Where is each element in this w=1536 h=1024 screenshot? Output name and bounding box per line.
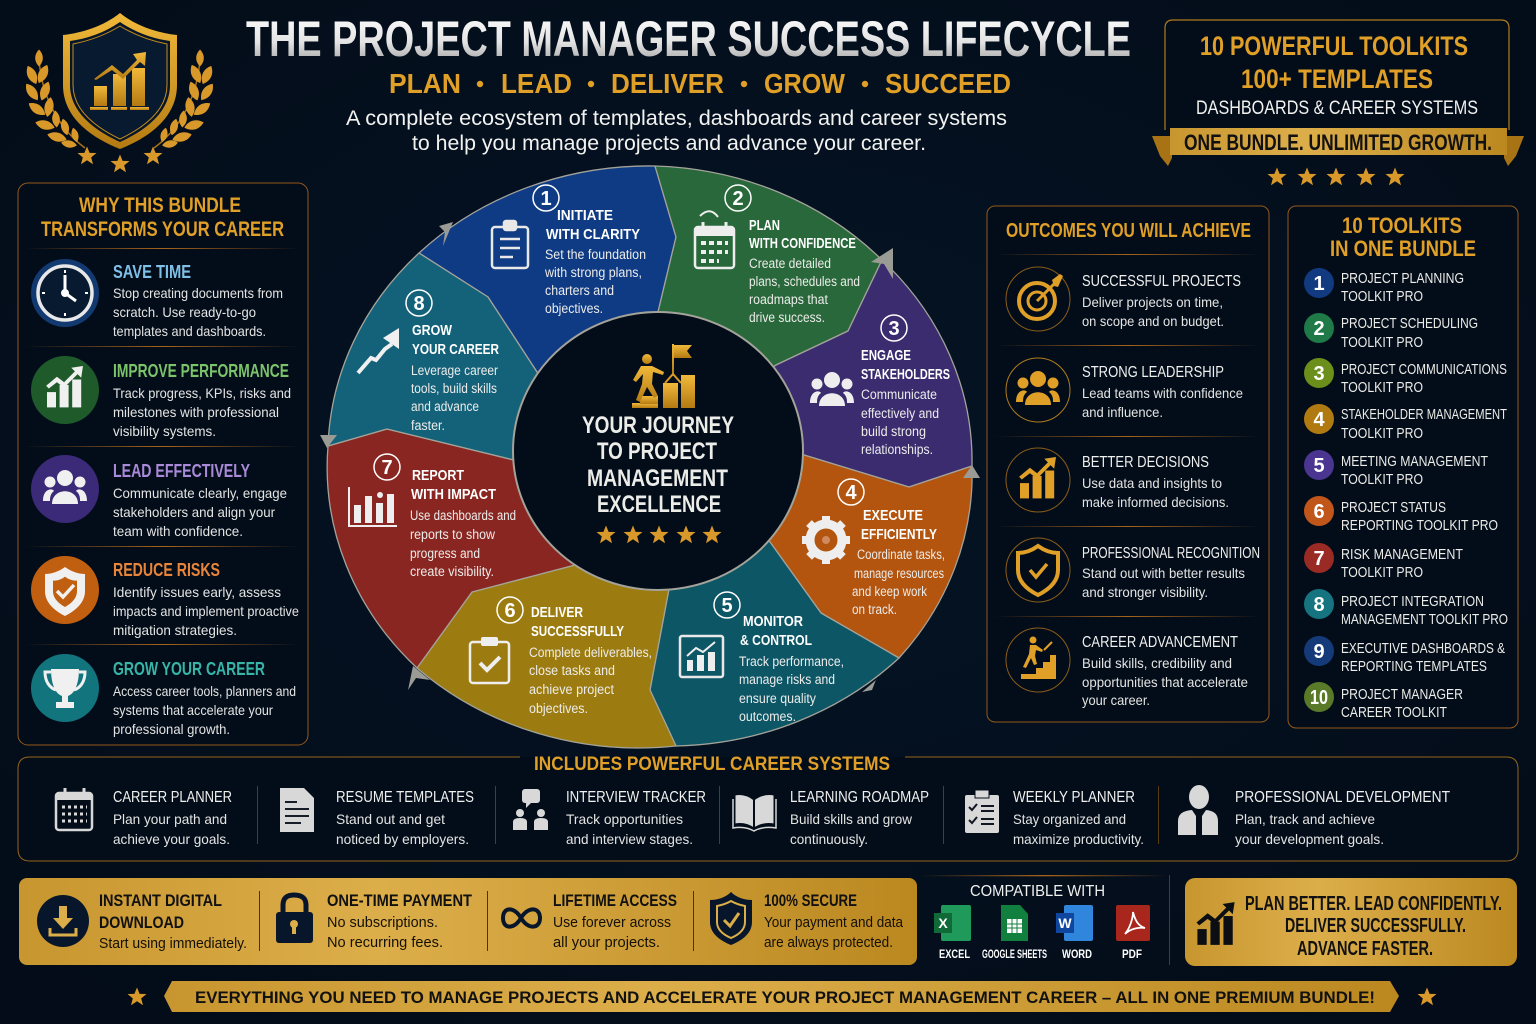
item: reduce risks: REDUCE RISKS (113, 560, 220, 580)
ribbon (1152, 128, 1524, 166)
step 2: Create detailed (749, 256, 831, 271)
step 4: Coordinate tasks, (857, 547, 945, 562)
panel: 10 toolkits (1288, 206, 1518, 728)
panel: bundle badge: 10 POWERFUL TOOLKITS (1200, 31, 1468, 61)
outcome: career advancement: your career. (1082, 692, 1150, 708)
toolkit 9: REPORTING TEMPLATES (1341, 659, 1487, 675)
step 3: effectively and (861, 406, 939, 421)
outcome: strong leadership: Lead teams with confidence (1082, 385, 1243, 401)
outcome: professional recognition: Stand out with better results (1082, 565, 1245, 581)
icon: shield (31, 556, 99, 624)
toolkit 7 (1304, 543, 1463, 581)
icon: gear (802, 516, 850, 564)
icon: checked clipboard (470, 637, 509, 683)
item: save time: SAVE TIME (113, 262, 191, 282)
step 3: Communicate (861, 387, 937, 402)
outcome: successful projects: SUCCESSFUL PROJECTS (1082, 273, 1241, 290)
item: reduce risks: Identify issues early, assess (113, 584, 281, 600)
step 6: Complete deliverables, (529, 645, 652, 660)
icon: pdf (1116, 905, 1150, 961)
icon: pdf: PDF (1122, 947, 1142, 961)
toolkits heading: 10 TOOLKITS (1342, 213, 1462, 238)
hub heading: MANAGEMENT (587, 465, 728, 492)
icon: document (280, 788, 314, 832)
system: career planner: achieve your goals. (113, 831, 230, 847)
outcome: better decisions (1082, 454, 1229, 510)
heading (41, 194, 284, 241)
toolkit 7: TOOLKIT PRO (1341, 565, 1423, 581)
step 4: on track. (852, 602, 897, 617)
step 3: STAKEHOLDERS (861, 366, 950, 383)
icon: climbing to flag (632, 344, 695, 408)
step 2: 2 (732, 188, 744, 210)
step 2: WITH CONFIDENCE (749, 235, 856, 252)
subtitle: LEAD (501, 68, 572, 99)
outcome: successful projects (1082, 273, 1241, 329)
title: THE PROJECT MANAGER SUCCESS LIFECYCLE (246, 11, 1131, 67)
step 5: & CONTROL (740, 632, 812, 649)
system: weekly planner (1013, 789, 1144, 847)
icon: padlock (276, 895, 313, 943)
icon: word (1056, 905, 1093, 961)
toolkit 1 (1304, 268, 1464, 305)
icon: interview (513, 789, 548, 830)
benefit: lifetime access: all your projects. (553, 934, 660, 951)
item: improve performance: IMPROVE PERFORMANCE (113, 361, 289, 381)
segment 2: plan (655, 166, 882, 451)
step 2: plans, schedules and (749, 274, 860, 289)
tagline: A complete ecosystem of templates, dashboards and career systems (346, 107, 1007, 130)
icon: shield check (1006, 538, 1070, 602)
outcome: career advancement: CAREER ADVANCEMENT (1082, 634, 1238, 651)
step 1: Set the foundation (545, 247, 646, 262)
step 4 (802, 479, 945, 617)
panel: compatible with (920, 875, 1170, 965)
icon: rising arrow (358, 328, 399, 373)
toolkit 10: CAREER TOOLKIT (1341, 705, 1447, 721)
step 3: relationships. (861, 442, 933, 457)
toolkit 3: TOOLKIT PRO (1341, 380, 1423, 396)
item: improve performance: milestones with professional (113, 404, 279, 420)
icon: excel: EXCEL (939, 947, 970, 961)
icon: trophy (31, 654, 99, 722)
item: grow your career: GROW YOUR CAREER (113, 659, 265, 679)
item: improve performance: visibility systems. (113, 423, 216, 439)
panel: career systems (18, 754, 1518, 861)
step 7: WITH IMPACT (411, 486, 496, 503)
subtitle: GROW (764, 68, 846, 99)
system: resume templates (336, 789, 474, 847)
item: improve performance: Track progress, KPIs, risks and (113, 385, 291, 401)
toolkit 6: 6 (1313, 501, 1325, 523)
step 8: 8 (413, 293, 425, 315)
hub stars (596, 526, 722, 543)
heading: WHY THIS BUNDLE (79, 194, 241, 217)
icon: open book (733, 795, 776, 831)
icon: clipboard (492, 221, 528, 268)
center hub (513, 312, 803, 590)
segment 3: engage (658, 260, 972, 487)
item: grow your career: professional growth. (113, 721, 230, 737)
step 5: ensure quality (739, 691, 816, 706)
emblem: gold shield with laurels (23, 13, 216, 172)
benefit: one-time payment: No recurring fees. (327, 934, 443, 951)
item: save time: Stop creating documents from (113, 285, 283, 301)
step 5: manage risks and (739, 672, 835, 687)
callout text (1245, 893, 1502, 960)
toolkit 6 (1304, 496, 1498, 534)
icon: infinity (503, 909, 540, 927)
toolkit 9: 9 (1313, 641, 1325, 663)
item: save time: scratch. Use ready-to-go (113, 304, 256, 320)
item: reduce risks (113, 560, 299, 638)
benefit: lifetime access: LIFETIME ACCESS (553, 891, 677, 910)
item: reduce risks: mitigation strategies. (113, 622, 237, 638)
segment 1: initiate (419, 166, 676, 451)
benefit: secure: 100% SECURE (764, 891, 857, 910)
step 6 (470, 597, 652, 716)
step 8: tools, build skills (411, 381, 497, 396)
step 3: 3 (888, 318, 900, 340)
benefit: secure (764, 891, 904, 951)
item: save time: templates and dashboards. (113, 323, 266, 339)
bottom banner (128, 981, 1436, 1012)
icon: clock (31, 259, 99, 327)
step 5: outcomes. (739, 709, 796, 724)
toolkit 10: 10 (1310, 687, 1328, 709)
segment 4: execute (658, 451, 972, 658)
lifecycle wheel (320, 166, 980, 748)
system: career planner: Plan your path and (113, 811, 227, 827)
toolkit 9 (1304, 636, 1505, 675)
benefit: secure: are always protected. (764, 934, 893, 951)
icon: excel (934, 905, 971, 961)
system: weekly planner: WEEKLY PLANNER (1013, 789, 1135, 806)
icon: target (1006, 267, 1070, 331)
system: interview tracker: and interview stages. (566, 831, 693, 847)
icon: secure shield (710, 892, 752, 945)
icon: checklist (965, 790, 999, 833)
benefit: instant download (99, 891, 247, 952)
toolkit 3 (1304, 358, 1507, 396)
system: learning roadmap (790, 789, 929, 847)
outcome: strong leadership: STRONG LEADERSHIP (1082, 364, 1224, 381)
toolkit 3: 3 (1313, 363, 1325, 385)
panel: why this bundle (18, 183, 308, 745)
subtitle: SUCCEED (885, 68, 1011, 99)
toolkit 10 (1304, 682, 1463, 721)
item: grow your career (113, 659, 296, 737)
step 6: achieve project (529, 682, 614, 697)
toolkit 5: MEETING MANAGEMENT (1341, 454, 1488, 470)
step 4: EXECUTE (863, 507, 923, 524)
segment 7: report (327, 429, 658, 668)
step 4: 4 (845, 482, 857, 504)
step 5: 5 (721, 595, 733, 617)
panel: bundle badge (1152, 20, 1524, 185)
panel: bundle badge: 100+ TEMPLATES (1241, 64, 1433, 94)
system: professional development (1235, 789, 1450, 847)
benefit: one-time payment: No subscriptions. (327, 914, 438, 931)
outcome: career advancement: Build skills, credibility and (1082, 655, 1232, 671)
icon: person (1178, 785, 1218, 835)
icon: people (810, 372, 854, 406)
step 1: with strong plans, (544, 265, 642, 280)
system: weekly planner: Stay organized and (1013, 811, 1126, 827)
step 8: faster. (411, 418, 445, 433)
system: resume templates: RESUME TEMPLATES (336, 789, 474, 806)
toolkits heading: IN ONE BUNDLE (1330, 236, 1476, 261)
icon: download (37, 895, 89, 947)
outcome: career advancement: opportunities that accelerate (1082, 674, 1248, 690)
benefit: lifetime access (553, 891, 677, 951)
rating stars (1268, 168, 1404, 185)
toolkits heading (1330, 213, 1476, 261)
segment 6: deliver (417, 451, 676, 748)
career systems heading: INCLUDES POWERFUL CAREER SYSTEMS (534, 754, 890, 775)
step 2 (695, 185, 860, 325)
outcome: professional recognition: PROFESSIONAL RECOGNITION (1082, 545, 1260, 562)
compatible heading: COMPATIBLE WITH (970, 883, 1105, 900)
hub heading: TO PROJECT (597, 438, 717, 465)
system: interview tracker (566, 789, 706, 847)
system: learning roadmap: continuously. (790, 831, 868, 847)
tagline (346, 107, 1007, 155)
outcome: better decisions: Use data and insights to (1082, 475, 1222, 491)
toolkit 5: TOOLKIT PRO (1341, 472, 1423, 488)
tagline: to help you manage projects and advance your career. (412, 132, 926, 155)
toolkit 2 (1304, 313, 1478, 351)
callout: plan better (1185, 878, 1517, 966)
icon: calendar (56, 788, 92, 830)
step 1: 1 (540, 188, 552, 210)
item: lead effectively (113, 461, 287, 539)
step 5 (680, 592, 844, 724)
toolkit 4: TOOLKIT PRO (1341, 426, 1423, 442)
benefit: instant download: INSTANT DIGITAL (99, 891, 222, 910)
system: interview tracker: INTERVIEW TRACKER (566, 789, 706, 806)
toolkit 7: RISK MANAGEMENT (1341, 547, 1463, 563)
outcome: successful projects: Deliver projects on time, (1082, 294, 1223, 310)
item: grow your career: Access career tools, planners and (113, 683, 296, 699)
icon: google sheets (982, 905, 1047, 961)
step 8: Leverage career (411, 363, 498, 378)
item: improve performance (113, 361, 291, 439)
step 4: manage resources (854, 566, 944, 581)
toolkit 6: REPORTING TOOLKIT PRO (1341, 518, 1498, 534)
step 1: objectives. (545, 301, 603, 316)
outcome: better decisions: BETTER DECISIONS (1082, 454, 1209, 471)
icon: word: W (1058, 915, 1072, 931)
step 4: EFFICIENTLY (861, 526, 937, 543)
step 7 (349, 454, 516, 579)
hub heading: EXCELLENCE (597, 491, 721, 518)
benefit: one-time payment (327, 891, 473, 951)
toolkit 2: PROJECT SCHEDULING (1341, 316, 1478, 332)
system: professional development: PROFESSIONAL DEVELOPMENT (1235, 789, 1450, 806)
system: interview tracker: Track opportunities (566, 811, 683, 827)
toolkit 2: TOOLKIT PRO (1341, 335, 1423, 351)
step 7: Use dashboards and (410, 508, 516, 523)
icon: excel: X (938, 915, 948, 931)
step 7: 7 (381, 457, 393, 479)
icon: monitor chart (680, 636, 723, 677)
step 8: YOUR CAREER (412, 341, 499, 358)
callout text: ADVANCE FASTER. (1297, 938, 1433, 960)
outcome: successful projects: on scope and on budget. (1082, 313, 1224, 329)
icon: team (1006, 358, 1070, 422)
panel: purchase benefits bar (19, 878, 917, 965)
bottom banner: EVERYTHING YOU NEED TO MANAGE PROJECTS AND ACCELERATE YOUR PROJECT MANAGEMENT CAREER – ALL IN ONE PREMIUM BUNDLE! (195, 988, 1375, 1007)
step 1: INITIATE (557, 207, 613, 224)
step 1: WITH CLARITY (546, 226, 640, 243)
step 1 (492, 185, 646, 316)
toolkit 1: 1 (1313, 273, 1325, 295)
item: lead effectively: team with confidence. (113, 523, 243, 539)
subtitle (389, 68, 1011, 99)
toolkit 2: 2 (1313, 318, 1325, 340)
step 7: create visibility. (410, 564, 494, 579)
system: weekly planner: maximize productivity. (1013, 831, 1144, 847)
outcome: better decisions: make informed decisions. (1082, 494, 1229, 510)
toolkit 5 (1304, 450, 1488, 488)
arrowheads (320, 222, 980, 692)
item: lead effectively: Communicate clearly, engage (113, 485, 287, 501)
heading: TRANSFORMS YOUR CAREER (41, 218, 284, 241)
benefit: one-time payment: ONE-TIME PAYMENT (327, 891, 473, 910)
subtitle: DELIVER (611, 68, 724, 99)
hub heading (582, 412, 734, 518)
step 2: roadmaps that (749, 292, 828, 307)
step 3: build strong (861, 424, 926, 439)
toolkit 1: TOOLKIT PRO (1341, 289, 1423, 305)
hub heading: YOUR JOURNEY (582, 412, 734, 439)
callout text: DELIVER SUCCESSFULLY. (1285, 915, 1466, 937)
step 3 (810, 315, 950, 457)
icon: climbing stairs (1006, 628, 1070, 692)
benefit: secure: Your payment and data (764, 914, 904, 931)
icon: growth chart dark (1196, 902, 1235, 945)
system: learning roadmap: LEARNING ROADMAP (790, 789, 929, 806)
system: learning roadmap: Build skills and grow (790, 811, 913, 827)
subtitle: PLAN (389, 68, 461, 99)
step 8 (358, 290, 499, 433)
step 8: and advance (411, 399, 479, 414)
system: resume templates: Stand out and get (336, 811, 445, 827)
item: reduce risks: impacts and implement proactive (113, 603, 299, 619)
benefit: instant download: DOWNLOAD (99, 913, 184, 932)
system: professional development: Plan, track and achieve (1235, 811, 1375, 827)
toolkit 7: 7 (1313, 548, 1325, 570)
outcome: strong leadership (1082, 364, 1243, 420)
icon: bar chart (349, 487, 397, 526)
segment 5: monitor (650, 451, 899, 746)
step 8: GROW (412, 322, 453, 339)
toolkit 5: 5 (1313, 455, 1325, 477)
item: grow your career: systems that accelerate your (113, 702, 273, 718)
toolkit 4: 4 (1313, 409, 1325, 431)
icon: growth chart (31, 356, 99, 424)
icon: calendar (695, 211, 734, 268)
step 7: REPORT (412, 467, 464, 484)
step 5: Track performance, (739, 654, 844, 669)
step 6: 6 (504, 600, 516, 622)
outcome: professional recognition: and stronger visibility. (1082, 584, 1208, 600)
toolkit 10: PROJECT MANAGER (1341, 687, 1463, 703)
toolkit 1: PROJECT PLANNING (1341, 271, 1464, 287)
outcomes heading: OUTCOMES YOU WILL ACHIEVE (1006, 220, 1251, 242)
system: career planner: CAREER PLANNER (113, 789, 232, 806)
step 6: DELIVER (531, 604, 583, 621)
step 7: progress and (410, 546, 480, 561)
outcome: career advancement (1082, 634, 1248, 708)
toolkit 4 (1304, 404, 1507, 442)
toolkit 8: PROJECT INTEGRATION (1341, 594, 1484, 610)
panel: bundle badge: DASHBOARDS & CAREER SYSTEMS (1196, 98, 1478, 119)
icon: team (31, 455, 99, 523)
icon: google sheets: GOOGLE SHEETS (982, 947, 1047, 961)
item: lead effectively: LEAD EFFECTIVELY (113, 461, 250, 481)
panel: outcomes (987, 206, 1269, 722)
step 5: MONITOR (743, 613, 803, 630)
system: resume templates: noticed by employers. (336, 831, 469, 847)
step 7: reports to show (410, 527, 495, 542)
item: save time (113, 262, 283, 339)
segment 8: grow (328, 253, 658, 460)
icon: chart (1006, 448, 1070, 512)
step 6: SUCCESSFULLY (531, 623, 624, 640)
toolkit 6: PROJECT STATUS (1341, 500, 1446, 516)
item: lead effectively: stakeholders and align your (113, 504, 275, 520)
toolkit 8 (1304, 589, 1508, 628)
step 6: objectives. (529, 701, 588, 716)
step 2: PLAN (749, 217, 780, 234)
outcome: strong leadership: and influence. (1082, 404, 1163, 420)
benefit: lifetime access: Use forever across (553, 914, 671, 931)
system: professional development: your development goals. (1235, 831, 1384, 847)
toolkit 8: 8 (1313, 594, 1325, 616)
step 6: close tasks and (529, 663, 615, 678)
icon: word: WORD (1062, 947, 1092, 961)
step 1: charters and (545, 283, 614, 298)
step 2: drive success. (749, 310, 825, 325)
benefit: instant download: Start using immediately. (99, 935, 247, 952)
step 3: ENGAGE (861, 347, 911, 364)
step 4: and keep work (852, 584, 927, 599)
outcome: professional recognition (1082, 545, 1260, 600)
system: career planner (113, 789, 232, 847)
